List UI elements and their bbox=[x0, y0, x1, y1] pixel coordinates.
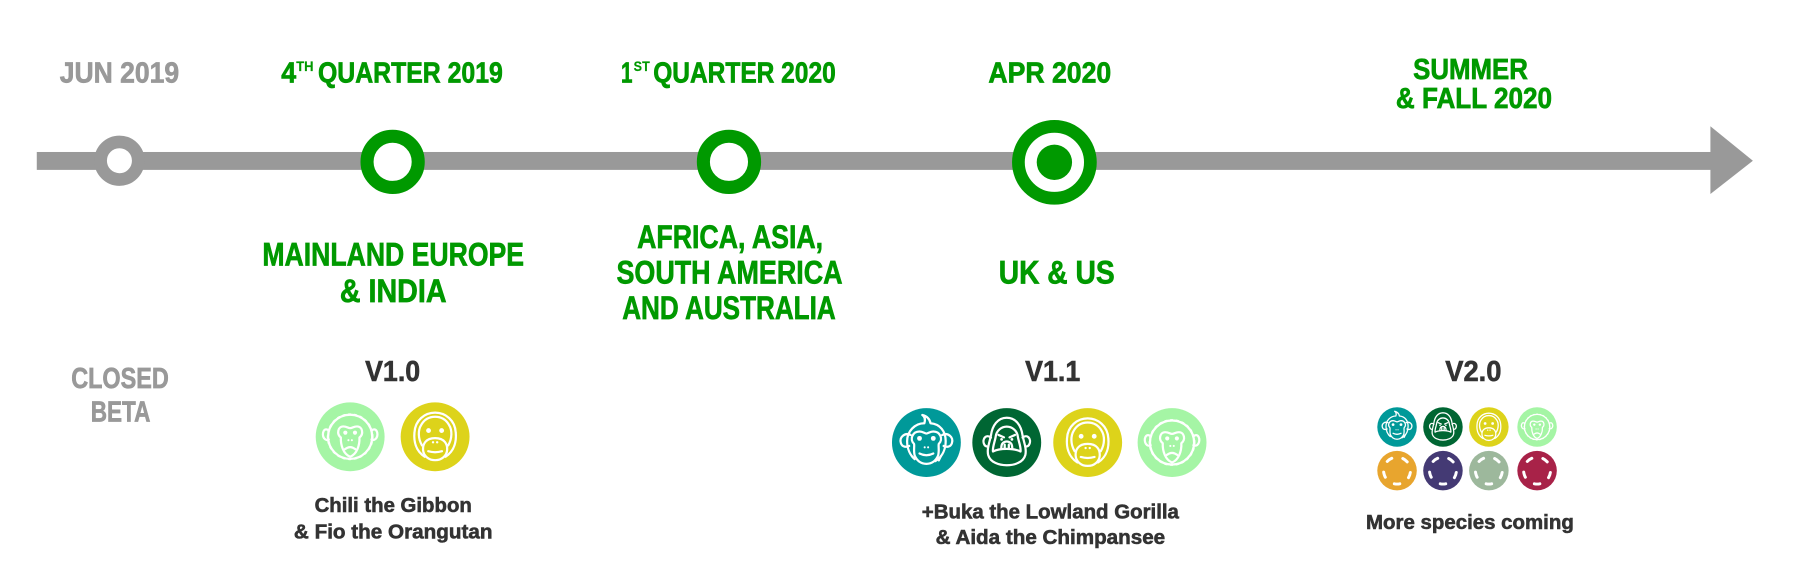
date: summer and fall 2020 bbox=[1396, 54, 1552, 115]
date: 1st quarter 2020: 1 bbox=[621, 58, 633, 90]
date: 4th quarter 2019: 4 bbox=[281, 58, 296, 90]
region: Africa, Asia, South America and Australia: AFRICA, ASIA, bbox=[637, 218, 823, 255]
icon: Chili the Gibbon bbox=[316, 402, 385, 471]
marker: Apr 2020 current bbox=[1018, 126, 1090, 198]
date: summer and fall 2020: SUMMER bbox=[1413, 54, 1528, 86]
date: 1st quarter 2020: ST bbox=[634, 59, 650, 74]
caption V1.0: & Fio the Orangutan bbox=[294, 521, 492, 543]
caption V1.0: Chili the Gibbon bbox=[315, 495, 472, 517]
marker: 4th quarter 2019 bbox=[367, 136, 418, 187]
marker: Jun 2019 bbox=[101, 142, 138, 180]
icon: Buka the Lowland Gorilla bbox=[972, 408, 1041, 477]
icon: upcoming species orange bbox=[1377, 451, 1417, 490]
icon: Fio the Orangutan bbox=[1053, 408, 1122, 477]
region: mainland Europe and India: & INDIA bbox=[340, 272, 447, 309]
version 1.0 block bbox=[294, 356, 492, 543]
region: Africa, Asia, South America and Australia bbox=[616, 218, 843, 326]
icon: upcoming species crimson bbox=[1517, 451, 1557, 490]
date: Jun 2019: JUN 2019 bbox=[60, 58, 179, 90]
version label V1.0: V1.0 bbox=[365, 356, 420, 388]
date: summer and fall 2020: & FALL 2020 bbox=[1396, 83, 1552, 115]
icon: upcoming species sage bbox=[1469, 451, 1509, 490]
caption V1.1: & Aida the Chimpansee bbox=[936, 527, 1165, 549]
icon: orangutan bbox=[1469, 407, 1509, 447]
label: closed beta bbox=[71, 363, 169, 428]
region: mainland Europe and India: MAINLAND EUROPE bbox=[262, 236, 524, 273]
label: closed beta: CLOSED bbox=[71, 363, 169, 395]
region: Africa, Asia, South America and Australia: AND AUSTRALIA bbox=[622, 289, 836, 326]
icon: teal primate bbox=[1377, 407, 1417, 447]
marker: 1st quarter 2020 bbox=[703, 136, 755, 187]
version label V2.0: V2.0 bbox=[1445, 356, 1501, 388]
region: UK and US: UK & US bbox=[999, 254, 1115, 291]
region: Africa, Asia, South America and Australia: SOUTH AMERICA bbox=[616, 254, 843, 291]
icon: gorilla bbox=[1423, 407, 1463, 447]
date: Apr 2020: APR 2020 bbox=[988, 58, 1111, 90]
timeline arrow bbox=[37, 126, 1753, 194]
date: 1st quarter 2020: QUARTER 2020 bbox=[653, 58, 836, 90]
icon: upcoming species purple bbox=[1423, 451, 1463, 490]
icon: Fio the Orangutan bbox=[401, 402, 470, 471]
date: 4th quarter 2019: QUARTER 2019 bbox=[318, 58, 503, 90]
icon: Chili the Gibbon bbox=[1138, 408, 1206, 477]
caption V1.1 bbox=[922, 501, 1180, 549]
caption V1.0 bbox=[294, 495, 492, 543]
region: mainland Europe and India bbox=[262, 236, 524, 309]
icon: light green primate bbox=[1517, 407, 1557, 447]
icon: Aida the Chimpansee bbox=[892, 408, 961, 477]
version label V1.1: V1.1 bbox=[1025, 356, 1080, 388]
date: 4th quarter 2019: TH bbox=[296, 59, 313, 74]
version 1.1 block bbox=[892, 356, 1206, 549]
label: closed beta: BETA bbox=[91, 396, 150, 428]
caption V1.1: +Buka the Lowland Gorilla bbox=[922, 501, 1180, 523]
caption V2.0: More species coming bbox=[1366, 512, 1574, 534]
version 2.0 block bbox=[1366, 356, 1574, 534]
